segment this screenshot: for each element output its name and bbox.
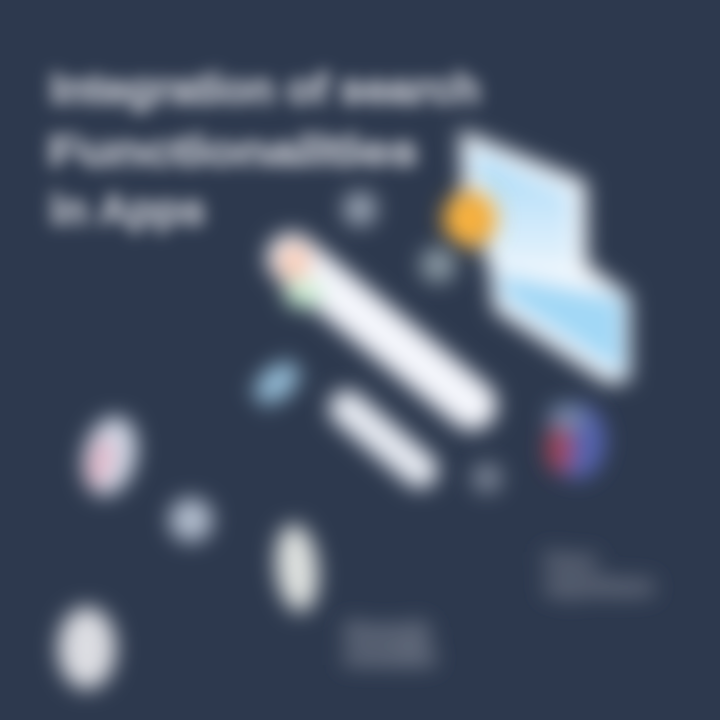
icon: orange circle	[443, 191, 497, 247]
icon: bottom-left capsule	[58, 607, 116, 689]
title: Functionalities	[48, 127, 418, 174]
icon: grey dot four	[169, 498, 213, 542]
label: lower right caption: experience	[545, 573, 653, 600]
title: Integration of search	[50, 65, 480, 112]
title	[48, 65, 480, 233]
icon: blue leaf	[247, 354, 307, 412]
icon: small grey dot one	[343, 192, 377, 226]
label: lower centre caption	[345, 619, 435, 670]
label: lower centre caption: results	[345, 643, 435, 670]
icon: small grey dot three	[472, 463, 502, 493]
icon: pink capsule	[75, 411, 145, 501]
illustration: search bar	[276, 242, 472, 405]
icon: small grey dot two	[420, 247, 456, 283]
illustration: secondary pill	[347, 408, 420, 470]
chart: pie	[546, 403, 606, 479]
label: lower right caption: User	[545, 549, 595, 576]
title: in Apps	[50, 186, 205, 233]
illustration: document panel	[460, 130, 630, 384]
label: lower centre caption: Search	[345, 619, 430, 646]
label: lower right caption	[545, 549, 653, 600]
icon: vertical capsule	[272, 522, 322, 614]
